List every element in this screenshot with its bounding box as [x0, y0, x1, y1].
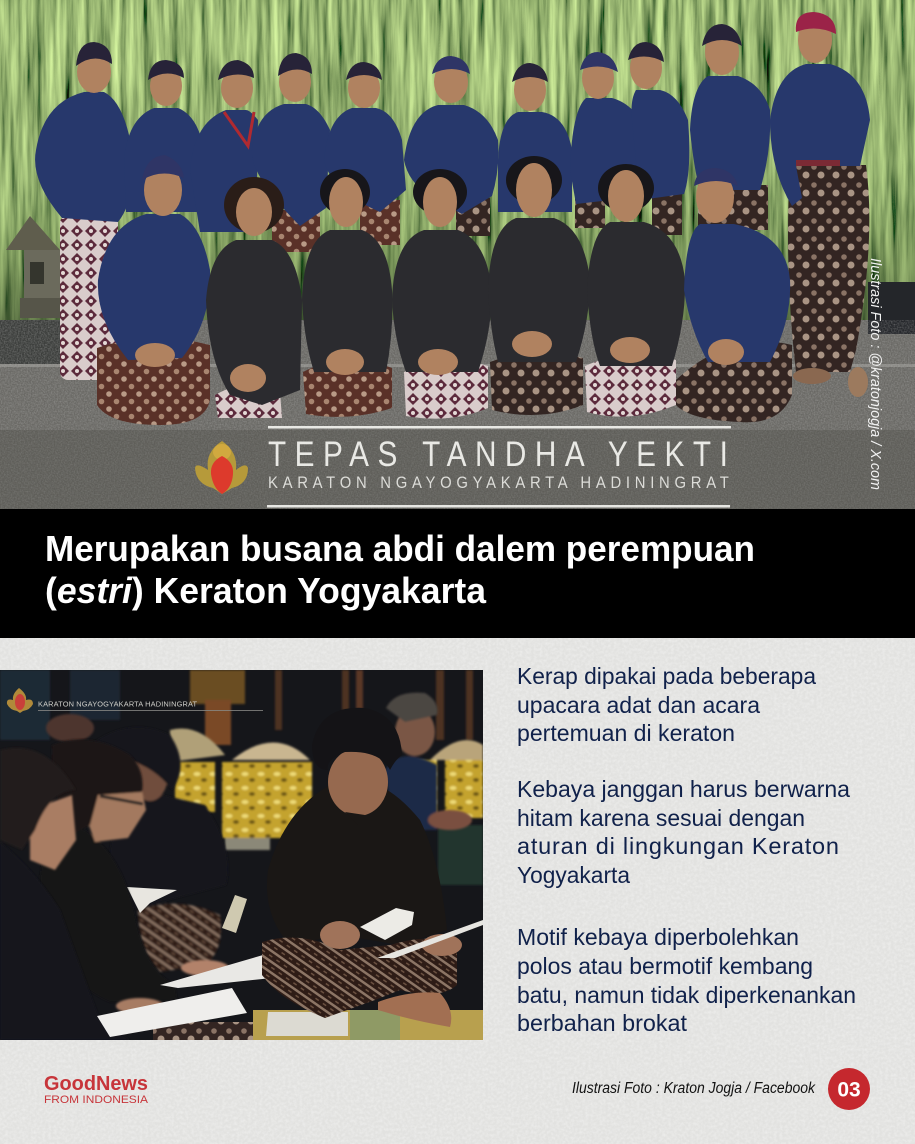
person 4 [252, 53, 330, 252]
person 10 [690, 24, 770, 230]
paper held by woman 3 [127, 887, 177, 913]
front row: kneeling abdi dalem [97, 155, 792, 425]
kneeling man 7 [676, 168, 792, 422]
page number badge [828, 1068, 870, 1110]
black kebaya [280, 790, 440, 886]
logo: GoodNews from Indonesia: FROM INDONESIA [44, 1094, 149, 1106]
hands and papers at left [97, 953, 272, 1040]
person 5 [324, 62, 406, 245]
woman 2 with glasses [53, 738, 161, 974]
emblem: royal crest [195, 441, 248, 494]
caption subtitle: KARATON NGAYOGYAKARTA HADININGRAT [268, 474, 729, 492]
top group photo [0, 0, 915, 509]
paragraph 1: pertemuan di keraton [517, 720, 735, 746]
paragraph 3: batu, namun tidak diperkenankan [517, 982, 856, 1008]
vine wall backdrop [0, 0, 915, 340]
mat on the floor [253, 1010, 483, 1040]
person 1 [35, 42, 133, 380]
photo credit: Ilustrasi Foto : @kratonjogja / X.com [867, 258, 883, 490]
kneeling woman 2 [206, 177, 302, 418]
gamelan gold panels and gongs [170, 728, 483, 885]
person 8 [570, 52, 646, 228]
caption title: TEPAS TANDHA YEKTI [268, 435, 728, 474]
stone pavement [0, 282, 915, 509]
paragraph 2: hitam karena sesuai dengan [517, 805, 805, 831]
paragraph 1: Kerap dipakai pada beberapa [517, 663, 817, 689]
paragraph 3: polos atau bermotif kembang [517, 953, 813, 979]
logo: GoodNews from Indonesia [44, 1073, 149, 1106]
paragraph 2 [517, 776, 851, 888]
gamelan photo [0, 670, 483, 1040]
person 9 [628, 42, 689, 235]
headline band [0, 509, 915, 638]
hands [320, 921, 360, 949]
rule below caption [267, 505, 730, 508]
man in cap in background [385, 693, 472, 830]
face [328, 748, 388, 816]
kneeling man 1 [97, 155, 210, 425]
loose paper [377, 920, 483, 958]
person 6 [404, 56, 498, 236]
paragraph 2: Yogyakarta [517, 862, 631, 888]
woman 1 at far left [0, 748, 88, 990]
paragraph 1 [517, 663, 817, 746]
paragraph 1: upacara adat dan acara [517, 692, 761, 718]
stone lantern [6, 216, 64, 318]
paragraph 3: Motif kebaya diperbolehkan [517, 924, 799, 950]
background pillars [0, 670, 473, 745]
video logo crest [7, 688, 33, 713]
paragraph 2: Kebaya janggan harus berwarna [517, 776, 851, 802]
person 11 in red headcloth [770, 12, 870, 397]
background seated woman's face [46, 714, 94, 742]
photo watermark: KARATON NGAYOGYAKARTA HADININGRAT [38, 700, 197, 708]
paragraph 2: aturan di lingkungan Keraton [517, 833, 839, 859]
kneeling woman 5 [488, 156, 590, 415]
plastic bottle [222, 895, 247, 933]
open book [360, 908, 414, 940]
logo: GoodNews from Indonesia: GoodNews [44, 1073, 148, 1095]
main woman reading [262, 708, 483, 1027]
kneeling woman 3 [302, 169, 392, 417]
headline line 1: Merupakan busana abdi dalem perempuan [45, 528, 755, 569]
bare foot [378, 992, 451, 1027]
back row: abdi dalem men in blue [35, 12, 870, 397]
person 2 [124, 60, 204, 212]
watermark rule [38, 710, 263, 711]
person 3 with red lanyard [190, 60, 258, 232]
kneeling woman 6 [585, 164, 685, 417]
person 7 [498, 63, 572, 212]
headline line 2: (estri) Keraton Yogyakarta [45, 570, 487, 611]
batik sarong [262, 938, 457, 1018]
page number badge: 03 [837, 1078, 861, 1102]
woman 3, third from left [134, 734, 227, 973]
paragraph 3: berbahan brokat [517, 1010, 687, 1036]
paragraph 3 [517, 924, 856, 1036]
footer photo credit: Ilustrasi Foto : Kraton Jogja / Facebook [572, 1080, 816, 1097]
hair bun [341, 708, 402, 770]
kneeling woman 4 [392, 169, 492, 419]
rule above caption [268, 426, 731, 428]
